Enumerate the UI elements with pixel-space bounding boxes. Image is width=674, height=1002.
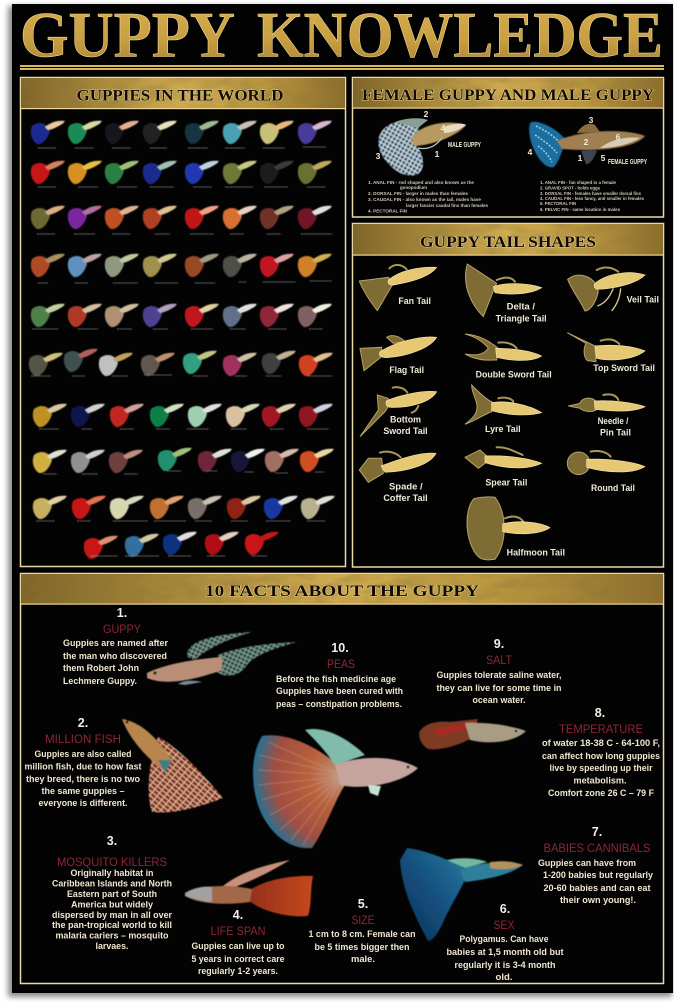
fact 4: life span [192,908,285,977]
female guppy diagram: 1 [578,153,583,163]
fact 8: temperature: can affect how long guppies [542,751,660,762]
fact 2: million fish: MILLION FISH [45,734,121,746]
fact 8: temperature: 8. [595,706,605,720]
fan tail: Fan Tail [398,296,431,306]
male guppy legend: 3. CAUDAL FIN - also known as the tail, males have [368,197,482,202]
fact 2: million fish: everyone is different. [38,798,128,809]
fact 10: peas: 10. [331,641,349,655]
header: female and male guppy: FEMALE GUPPY AND MALE GUPPY [362,87,654,104]
male guppy legend: gonopodium [400,185,427,190]
header: guppies in the world [21,78,345,109]
panel: female guppy and male guppy [352,78,664,217]
fish grid row 5 [31,304,332,329]
male guppy diagram: 3 [376,151,381,161]
fact 8: temperature: of water 18-38 C - 64-100 F, [542,738,660,749]
fact 6: sex: SEX [494,920,515,932]
fact 3: mosquito killers: larvaes. [96,941,128,952]
needle tail: Pin Tail [600,428,631,438]
header: 10 facts: 10 FACTS ABOUT THE GUPPY [205,583,479,600]
fact 8: temperature: live by speeding up their [550,763,653,774]
fact 7: babies cannibals: Guppies can have from [538,858,636,869]
needle tail: Needle / [598,416,629,426]
female guppy diagram: 3 [589,115,594,125]
male guppy diagram: 4 [441,123,446,133]
fact 6: sex: old. [496,972,512,983]
header: guppy tail shapes: GUPPY TAIL SHAPES [420,234,596,251]
fact 9: salt: ocean water. [472,695,526,706]
lyre tail [465,385,542,434]
fact 5: size: be 5 times bigger then [314,942,410,953]
fact 3: mosquito killers: Caribbean Islands and North [52,878,172,890]
fact 8: temperature: Comfort zone 26 C – 79 F [548,788,654,799]
male guppy legend: larger fancier caudal fins than females [406,203,489,208]
spade tail: Coffer Tail [383,493,428,503]
fact 6: sex: babies at 1,5 month old but [446,947,564,958]
flag tail [360,336,437,375]
fact 9: salt: SALT [486,655,512,667]
spade tail: Spade / [389,482,423,492]
fact 9: salt: Guppies tolerate saline water, [436,670,562,681]
panel: guppy tail shapes [352,224,664,567]
female guppy legend: 4. CAUDAL FIN - less fancy, and smaller in females [540,196,645,201]
fact 1: guppy: Lechmere Guppy. [63,676,137,687]
female guppy diagram: 6 [616,132,621,142]
double sword tail: Double Sword Tail [476,369,552,379]
fish grid row 9 [33,496,335,521]
fish photo: fact 4 [185,860,313,916]
fact 2: million fish: 2. [78,716,88,730]
female guppy diagram: 4 [528,147,533,157]
fact 8: temperature: TEMPERATURE [559,724,643,736]
female guppy legend: 3. DORSAL FIN - females have smaller dorsal fins [540,191,642,196]
fish grid row 4 [31,254,332,283]
fish photo: fact 2 [122,719,223,813]
fact 7: babies cannibals: 20-60 babies and can eat [544,883,651,894]
fact 7: babies cannibals: BABIES CANNIBALS [544,843,651,855]
fish photo: center [253,729,418,848]
male guppy legend [368,180,489,214]
female guppy diagram: FEMALE GUPPY [608,159,647,166]
fact 3: mosquito killers [52,834,172,952]
lyre tail: Lyre Tail [485,424,521,434]
fact 4: life span: Guppies can live up to [192,941,285,952]
fact 1: guppy: the man who discovered [63,651,167,662]
fact 3: mosquito killers: the pan-tropical world to kill [52,920,172,931]
header: 10 facts [21,574,663,605]
fact 5: size: SIZE [352,915,375,927]
fact 5: size: 1 cm to 8 cm. Female can [308,929,416,940]
female guppy diagram: 2 [584,137,589,147]
fish grid row 8 [33,448,334,474]
fact 3: mosquito killers: Originally habitat in [70,868,154,879]
halfmoon tail: Halfmoon Tail [507,548,565,558]
panel: guppies in the world [20,78,346,566]
female guppy legend: 6. PELVIC FIN - same location in males [540,207,621,212]
fact 2: million fish [24,716,142,809]
fact 7: babies cannibals: 1-200 babies but regularly [543,870,654,881]
fact 1: guppy: Guppies are named after [63,638,168,649]
bottom sword tail: Bottom [390,415,421,425]
tail shape diagrams [359,264,659,560]
fact 2: million fish: Guppies are also called [34,749,132,760]
double sword tail [465,334,552,379]
female guppy legend: 2. GRAVID SPOT - holds eggs [540,186,601,190]
male guppy legend: 4. PECTORAL FIN [368,208,407,214]
title: GUPPY [20,0,235,72]
spade tail [359,452,436,503]
bottom sword tail: Sword Tail [383,426,428,436]
male guppy diagram: MALE GUPPY [448,142,481,149]
fan tail [359,265,437,311]
fact 3: mosquito killers: MOSQUITO KILLERS [57,857,167,869]
fact 7: babies cannibals: their own young!. [560,895,636,906]
fact 2: million fish: they breed, there is no two [26,774,140,785]
delta tail: Delta / [507,301,536,311]
male guppy legend: 2. DORSAL FIN - larger in males than females [368,191,469,196]
spear tail: Spear Tail [485,478,527,488]
fact 8: temperature [542,706,660,799]
veil tail [568,267,659,311]
fact 10: peas [276,641,403,710]
fact 5: size: 5. [358,897,368,911]
fact 6: sex: Polygamus. Can have [460,934,548,945]
male guppy diagram [376,109,481,176]
fact 10: peas: peas – constipation problems. [276,699,402,710]
male guppy diagram: 1 [435,149,440,159]
fact 10: peas: PEAS [327,659,355,671]
halfmoon tail [467,497,565,560]
fact 3: mosquito killers: malaria cariers – mosquito [56,930,169,942]
fact 4: life span: LIFE SPAN [210,926,266,938]
fish photo: fact 1 [147,632,297,685]
fish grid row 6 [29,349,333,376]
fact 4: life span: 4. [233,908,243,922]
needle tail [568,394,645,438]
fact 2: million fish: the same guppies – [42,786,125,797]
spear tail [465,447,542,488]
fact 5: size [308,897,416,965]
delta tail: Triangle Tail [496,314,547,324]
fact 3: mosquito killers: America but widely [71,900,154,910]
fact 10: peas: Before the fish medicine age [276,674,396,685]
fish grid row 2 [31,161,332,187]
header: guppies in the world: GUPPIES IN THE WORLD [76,88,284,104]
panel: 10 facts about the guppy [20,574,664,984]
bottom sword tail [360,387,437,437]
fact 2: million fish: million fish, due to how fast [24,762,142,772]
female guppy diagram: 5 [601,153,606,163]
fact 1: guppy: 1. [117,606,127,620]
fact 3: mosquito killers: Eastern part of South [67,889,157,900]
delta tail [466,264,547,324]
fact 6: sex: 6. [500,902,510,916]
fact 4: life span: regularly 1-2 years. [198,966,278,977]
fish grid row 1 [31,121,332,148]
fact 7: babies cannibals [538,825,654,906]
title rule [20,65,664,70]
fish grid row 3 [31,206,332,234]
fact 1: guppy [63,606,168,687]
fact 9: salt: they can live for some time in [436,683,562,694]
flag tail: Flag Tail [389,365,424,375]
fact 6: sex: regularly it is 3-4 month [454,960,556,971]
title [20,0,663,72]
female guppy diagram [528,115,647,167]
round tail: Round Tail [591,483,635,493]
header: guppy tail shapes [353,224,663,256]
fish grid row 7 [33,404,333,429]
female guppy legend [540,180,645,212]
round tail [567,451,645,493]
male guppy legend: 1. ANAL FIN - rod shaped and also known as the [368,180,475,185]
header: female and male guppy [353,78,663,109]
fact 6: sex [446,902,564,983]
female guppy legend: 1. ANAL FIN - fan shaped in a female [540,180,617,185]
veil tail: Veil Tail [627,295,659,305]
fact 9: salt: 9. [494,637,504,651]
fish photo: fact 9 [419,719,526,749]
fact 1: guppy: them Robert John [63,663,139,674]
fact 8: temperature: metabolism. [574,776,626,786]
fact 3: mosquito killers: 3. [107,834,117,848]
fact 3: mosquito killers: dispersed by man in all over [52,910,172,921]
fact 9: salt [436,637,562,706]
top sword tail: Top Sword Tail [593,363,655,373]
fact 5: size: male. [351,954,375,965]
fact 10: peas: Guppies have been cured with [276,686,403,697]
male guppy diagram: 2 [424,109,429,119]
fish photo: fact 6 [400,848,523,941]
fish grid row 10 [84,532,279,559]
female guppy legend: 5. PECTORAL FIN [540,201,576,206]
fact 4: life span: 5 years in correct care [192,954,284,965]
fact 7: babies cannibals: 7. [592,825,602,839]
top sword tail [567,333,655,373]
fact 1: guppy: GUPPY [103,624,141,636]
